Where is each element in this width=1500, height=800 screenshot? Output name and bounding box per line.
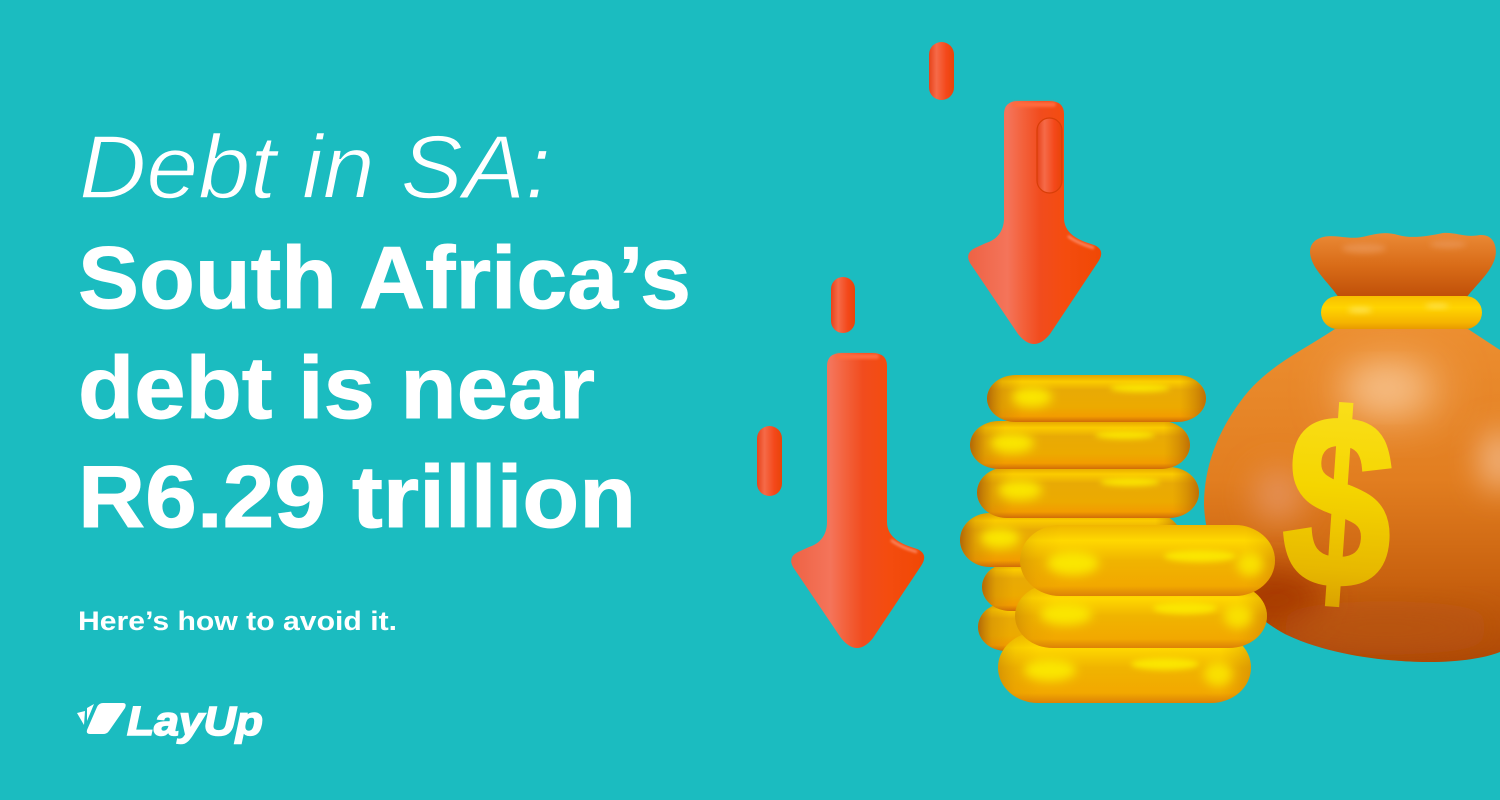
title line: debt is near: debt is near: [78, 338, 595, 437]
coin 2: [970, 421, 1190, 469]
icon: money bag: [1204, 233, 1500, 662]
pill: top: [929, 42, 954, 100]
coin stack: front: [998, 525, 1275, 703]
coin 4: [960, 513, 1182, 567]
headline: [78, 118, 691, 546]
coin 6: [978, 603, 1178, 651]
bag body: [1204, 329, 1500, 662]
title line: Debt in SA: Debt in SA:: [79, 118, 551, 218]
arrow: left down arrow: [791, 353, 924, 648]
bag neck: [1310, 233, 1496, 298]
coin C: [998, 632, 1251, 703]
title line: R6.29 trillion: R6.29 trillion: [78, 447, 636, 546]
coin 3: [977, 467, 1199, 518]
arrow: right down arrow: [968, 101, 1101, 344]
dollar sign: $: [1276, 361, 1402, 642]
logo: LayUp: [77, 698, 263, 744]
logo wordmark: LayUp: [127, 698, 263, 744]
coin A: [1020, 525, 1275, 596]
coin B: [1015, 584, 1267, 648]
coin stack: back: [960, 375, 1206, 651]
pill: middle: [831, 277, 855, 333]
logo icon: [77, 703, 126, 734]
pill: left: [757, 426, 782, 496]
coin 5: [982, 563, 1182, 611]
coin 1: [987, 375, 1206, 422]
title line: South Africa's: South Africa’s: [78, 228, 691, 327]
pill overlapping arrow: [1037, 118, 1062, 193]
bag tie ring: [1321, 296, 1482, 329]
subheading: Here’s how to avoid it.: [78, 606, 397, 636]
